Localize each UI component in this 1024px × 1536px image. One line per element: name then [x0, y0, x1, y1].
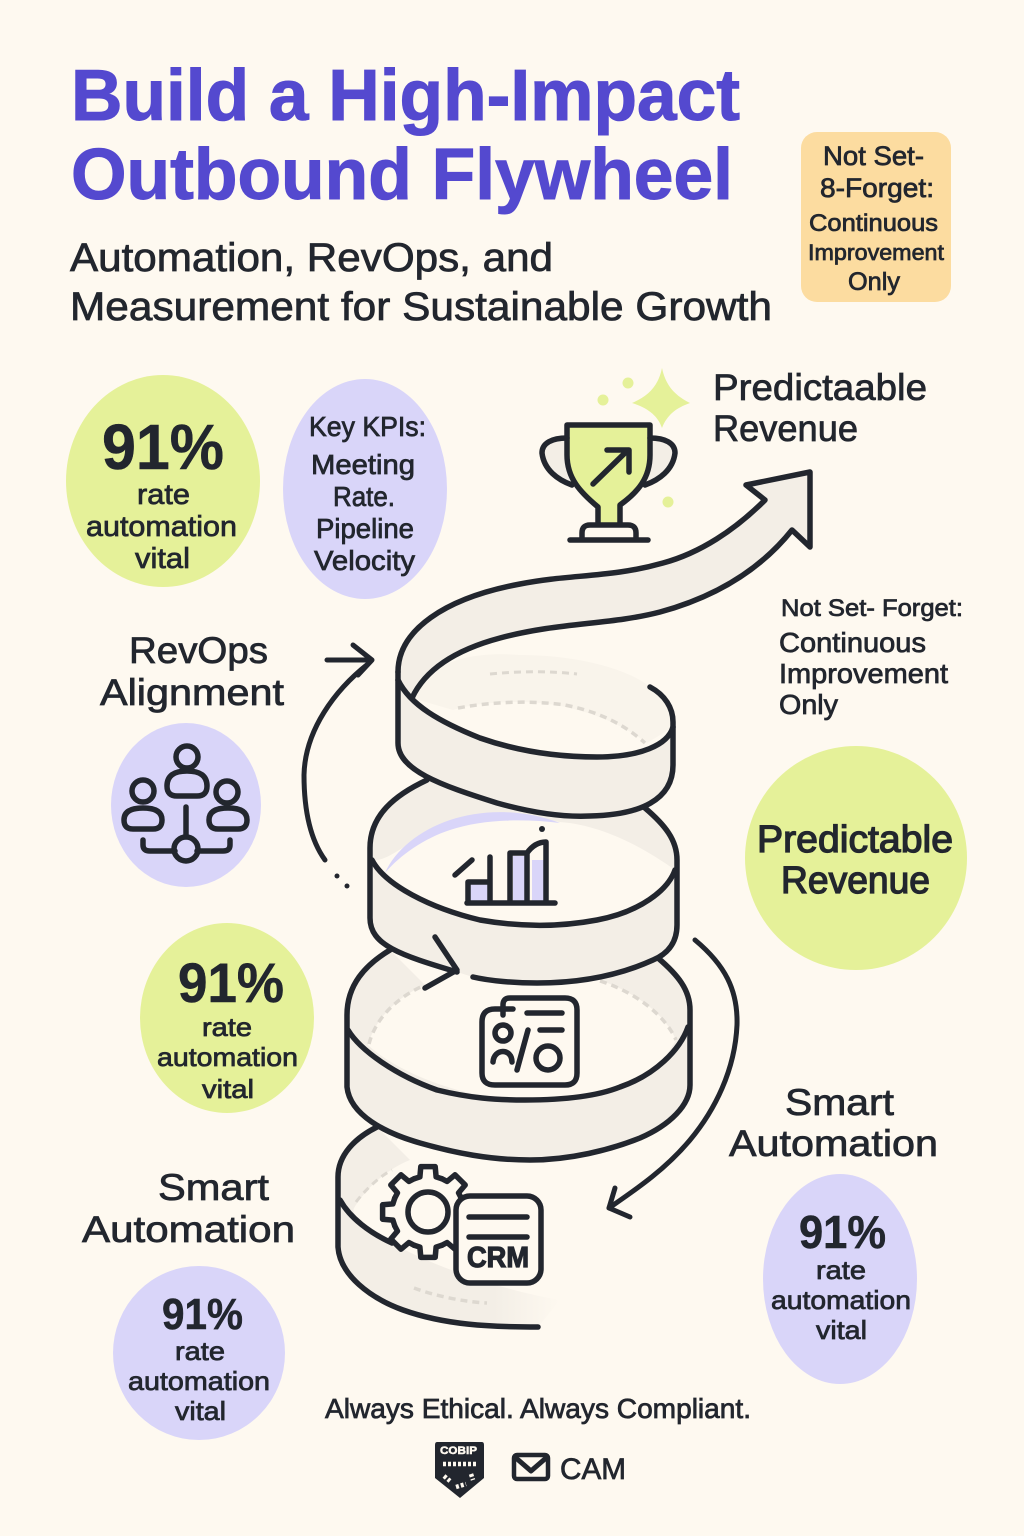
label: predictable revenue top: Revenue [713, 408, 858, 449]
label: smart automation right [729, 1082, 938, 1164]
icon: bar chart [455, 826, 555, 903]
badge: key KPIs: Key KPIs: [309, 411, 426, 442]
badge: 91% rate large green: vital [135, 543, 190, 575]
badge: 91% rate medium green [140, 923, 314, 1113]
label: smart automation right: Smart [785, 1082, 895, 1123]
icon: compliance shield: COBIP [440, 1445, 477, 1457]
text: continuous improvement note: Only [779, 689, 838, 720]
icon: gear and CRM card [383, 1167, 541, 1283]
badge: 91% rate purple right [763, 1174, 917, 1384]
badge: 91% rate purple left: rate [175, 1336, 225, 1366]
callout: not set and forget: Improvement [808, 240, 944, 265]
badge: predictable revenue [745, 746, 967, 970]
text: continuous improvement note: Continuous [779, 627, 926, 658]
text: continuous improvement note [779, 595, 963, 720]
badge: key KPIs: Velocity [314, 545, 415, 576]
flywheel spiral [338, 472, 810, 1327]
subtitle: Measurement for Sustainable Growth [70, 285, 772, 329]
badge: predictable revenue: Predictable [757, 819, 953, 861]
badge: 91% rate medium green: automation [157, 1042, 298, 1072]
badge: 91% rate purple right: rate [816, 1255, 866, 1285]
badge: 91% rate purple left: 91% [162, 1290, 243, 1339]
icon: scorecard with percent [482, 998, 577, 1085]
title: Outbound Flywheel [71, 135, 733, 215]
callout: not set and forget: Only [848, 268, 901, 296]
spiral level 3 [347, 950, 690, 1160]
badge: RevOps team icon [111, 723, 261, 887]
badge: key KPIs: Rate. [333, 481, 395, 512]
label: smart automation left [82, 1167, 295, 1250]
spiral level 2 [370, 780, 677, 988]
label: predictable revenue top: Predictaable [713, 367, 927, 408]
icon: gear and CRM card: CRM [467, 1242, 529, 1274]
badge: 91% rate medium green: rate [202, 1012, 252, 1042]
text: continuous improvement note: Improvement [779, 658, 948, 689]
subtitle: Automation, RevOps, and [70, 236, 553, 280]
badge: key KPIs: Meeting [311, 449, 415, 480]
icon: trophy with sparkle [542, 368, 690, 540]
subtitle [70, 236, 772, 329]
label: RevOps alignment: Alignment [100, 672, 285, 713]
callout: not set and forget: Not Set- [823, 141, 924, 171]
icon: envelope with CAM label: CAM [560, 1453, 626, 1486]
icon: envelope with CAM label [514, 1453, 626, 1486]
title [71, 56, 740, 215]
spiral level 4 [338, 1127, 560, 1327]
callout: not set and forget: 8-Forget: [820, 173, 934, 203]
badge: 91% rate large green [66, 375, 260, 587]
callout: not set and forget: Continuous [809, 210, 938, 237]
badge: key KPIs: Pipeline [316, 513, 414, 544]
arrow: left curved feedback [304, 645, 372, 888]
text: continuous improvement note: Not Set- Forget: [781, 595, 963, 622]
badge: 91% rate purple left: vital [175, 1396, 226, 1426]
arrow: right curved down [609, 940, 737, 1217]
badge: 91% rate large green: automation [86, 511, 237, 543]
badge: 91% rate purple right: 91% [799, 1206, 886, 1258]
label: smart automation right: Automation [729, 1123, 938, 1164]
badge: 91% rate purple right: automation [771, 1285, 911, 1315]
label: RevOps alignment: RevOps [129, 630, 268, 671]
badge: 91% rate purple left: automation [128, 1366, 270, 1396]
badge: key KPIs [283, 379, 447, 599]
label: smart automation left: Smart [158, 1167, 270, 1208]
label: smart automation left: Automation [82, 1209, 295, 1250]
badge: 91% rate large green: rate [137, 479, 190, 511]
badge: predictable revenue: Revenue [781, 860, 930, 902]
icon: compliance shield [435, 1442, 484, 1498]
title: Build a High-Impact [71, 56, 740, 136]
badge: 91% rate purple right: vital [816, 1315, 867, 1345]
badge: 91% rate medium green: 91% [178, 951, 284, 1014]
label: RevOps alignment [100, 630, 285, 713]
spiral level 1 and rising arrow [398, 472, 810, 816]
badge: 91% rate medium green: vital [202, 1074, 254, 1104]
label: predictable revenue top [713, 367, 927, 449]
footer text: Always Ethical. Always Compliant. [325, 1393, 751, 1424]
badge: 91% rate purple left [113, 1266, 285, 1440]
badge: 91% rate large green: 91% [102, 411, 224, 483]
callout: not set and forget [801, 132, 951, 302]
